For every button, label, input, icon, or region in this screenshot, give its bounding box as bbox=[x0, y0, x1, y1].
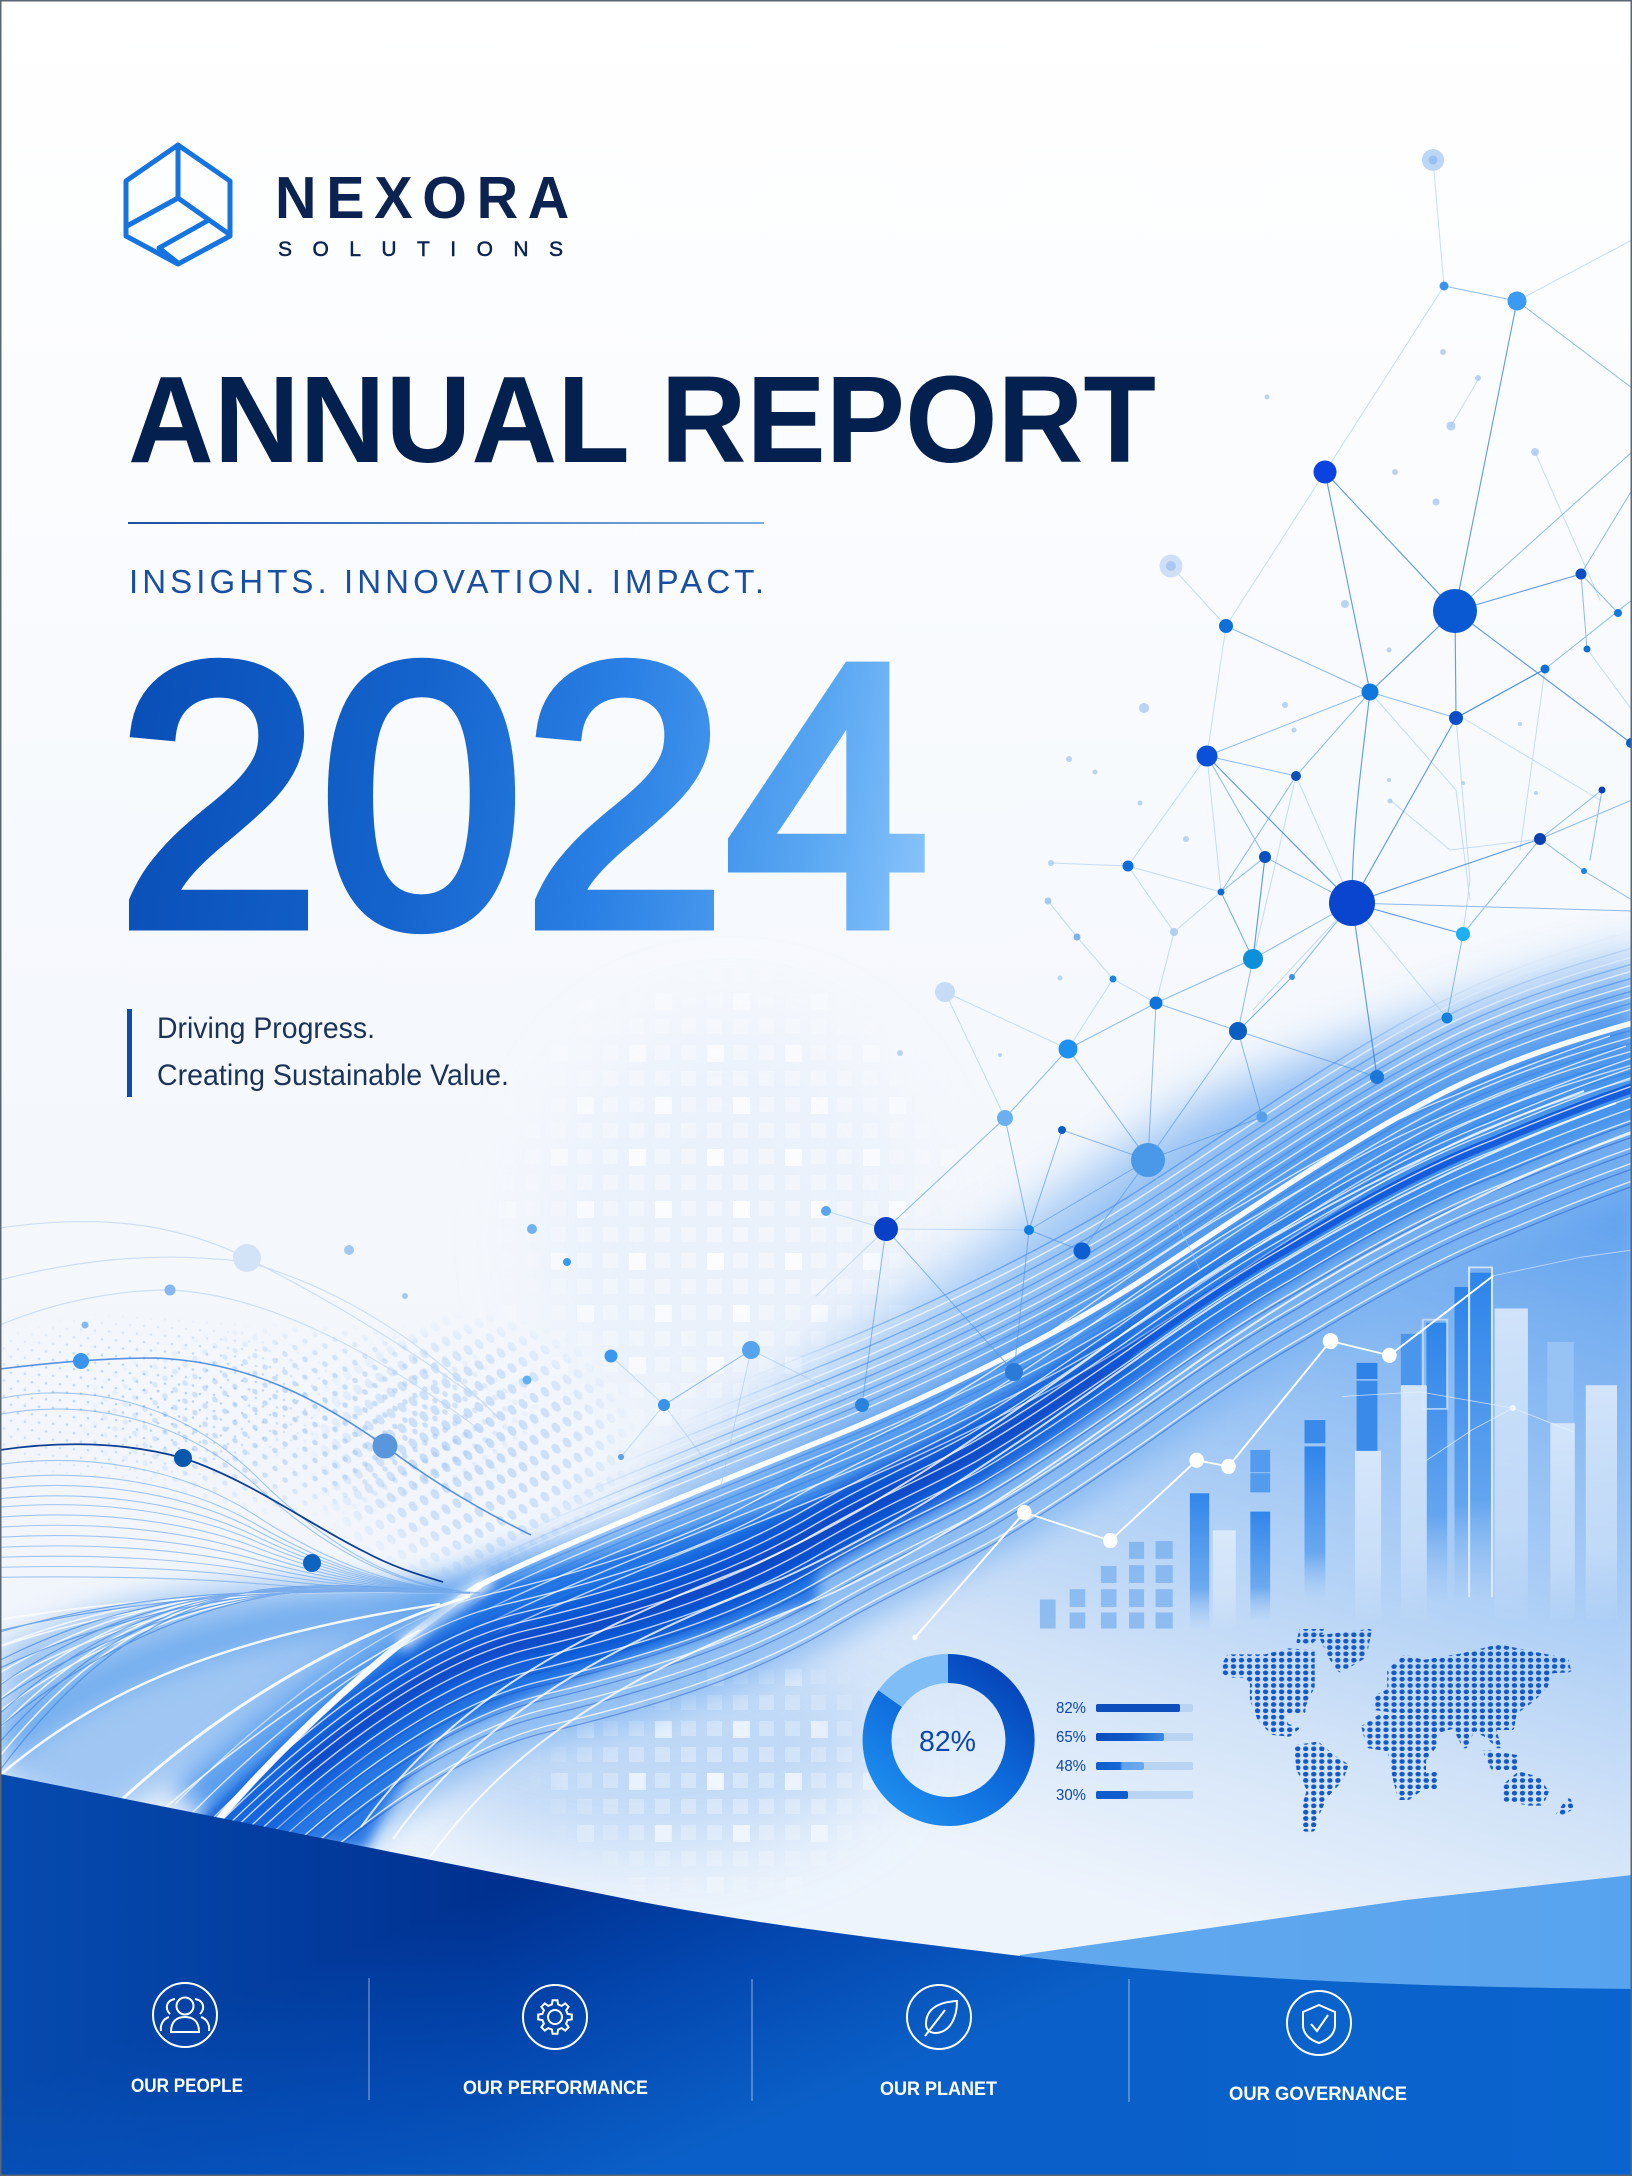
medium edges bbox=[664, 286, 1632, 1405]
white arcs into lower left bbox=[0, 1596, 470, 1830]
statement bbox=[127, 1009, 509, 1097]
upper white and blue streaks bbox=[472, 948, 1630, 1635]
pale edges bbox=[611, 160, 1632, 1490]
pale pixel squares upper bbox=[592, 1068, 868, 1374]
statement line one: Driving Progress. bbox=[157, 1012, 375, 1045]
donut chart bbox=[863, 1654, 1035, 1826]
footer wedge bbox=[1020, 1875, 1632, 1995]
progress bars: 82% bbox=[1056, 1700, 1086, 1717]
left dark wedge bbox=[208, 1500, 817, 1850]
item: our planet bbox=[880, 1985, 997, 2100]
network nodes bbox=[344, 149, 1632, 1460]
dotted world map bbox=[1221, 1631, 1571, 1830]
item: our governance bbox=[1229, 1991, 1407, 2105]
upper fan lines bbox=[0, 1393, 480, 1593]
white line chart bbox=[915, 1276, 1493, 1637]
upper streak zone bbox=[480, 950, 1632, 1640]
network edges bbox=[611, 160, 1632, 1490]
thin lines across dark band bbox=[175, 1036, 1632, 1934]
pale top arcs bbox=[0, 1222, 500, 1430]
icon: shield bbox=[1287, 1991, 1351, 2055]
accent bar bbox=[127, 1009, 132, 1097]
label: our governance: OUR GOVERNANCE bbox=[1229, 2084, 1407, 2105]
dark wave line bbox=[0, 1444, 443, 1582]
label: our planet: OUR PLANET bbox=[880, 2079, 997, 2100]
bar and line chart bbox=[912, 1250, 1632, 1640]
below band blue field bbox=[215, 1082, 1632, 1950]
bars bbox=[1190, 1267, 1617, 1629]
item: our performance bbox=[463, 1985, 648, 2099]
wordmark: NEXORA bbox=[275, 165, 579, 231]
bright white streak bbox=[205, 1018, 1632, 1835]
sub wordmark: SOLUTIONS bbox=[278, 238, 576, 261]
faint secondary line bbox=[1342, 1392, 1574, 1461]
icon: leaf bbox=[907, 1985, 971, 2049]
small squares grid bbox=[1040, 1541, 1173, 1629]
title: ANNUAL REPORT bbox=[128, 352, 1156, 489]
left wave glow bbox=[0, 1582, 470, 1825]
icon: people bbox=[153, 1983, 217, 2047]
lower fan lines bbox=[0, 1586, 470, 1756]
icon: gear bbox=[523, 1985, 587, 2049]
logo hexagon icon bbox=[126, 145, 230, 264]
footer panel bbox=[0, 1774, 1632, 2176]
label: our people: OUR PEOPLE bbox=[131, 2076, 243, 2097]
wave nodes bbox=[73, 1244, 398, 1572]
logo bbox=[126, 145, 579, 264]
progress bars: 65% bbox=[1056, 1729, 1086, 1746]
tagline: INSIGHTS. INNOVATION. IMPACT. bbox=[129, 563, 767, 600]
faint dots upper field bbox=[897, 349, 1539, 1057]
dividers bbox=[369, 1978, 1129, 2102]
statement line two: Creating Sustainable Value. bbox=[157, 1059, 509, 1092]
progress bars: 48% bbox=[1056, 1758, 1086, 1775]
left flowing fans bbox=[0, 1222, 531, 1830]
progress bars bbox=[1056, 1700, 1193, 1804]
label: our performance: OUR PERFORMANCE bbox=[463, 2078, 648, 2099]
year: 2024 bbox=[117, 587, 929, 1003]
heading rule bbox=[128, 522, 764, 524]
blue wave line bbox=[0, 1358, 531, 1535]
item: our people bbox=[131, 1983, 243, 2097]
halftone dot field bbox=[2, 1316, 622, 1570]
dark band core bbox=[215, 1082, 1632, 1850]
flowing wave band bbox=[175, 926, 1632, 1942]
mid band glow bbox=[215, 1062, 1632, 1830]
strong edges bbox=[1207, 301, 1631, 1077]
donut value: 82% bbox=[919, 1726, 976, 1758]
pixel squares lower bbox=[551, 1669, 877, 1878]
long white lower arcs bbox=[361, 1091, 1632, 1861]
progress bars: 30% bbox=[1056, 1787, 1086, 1804]
